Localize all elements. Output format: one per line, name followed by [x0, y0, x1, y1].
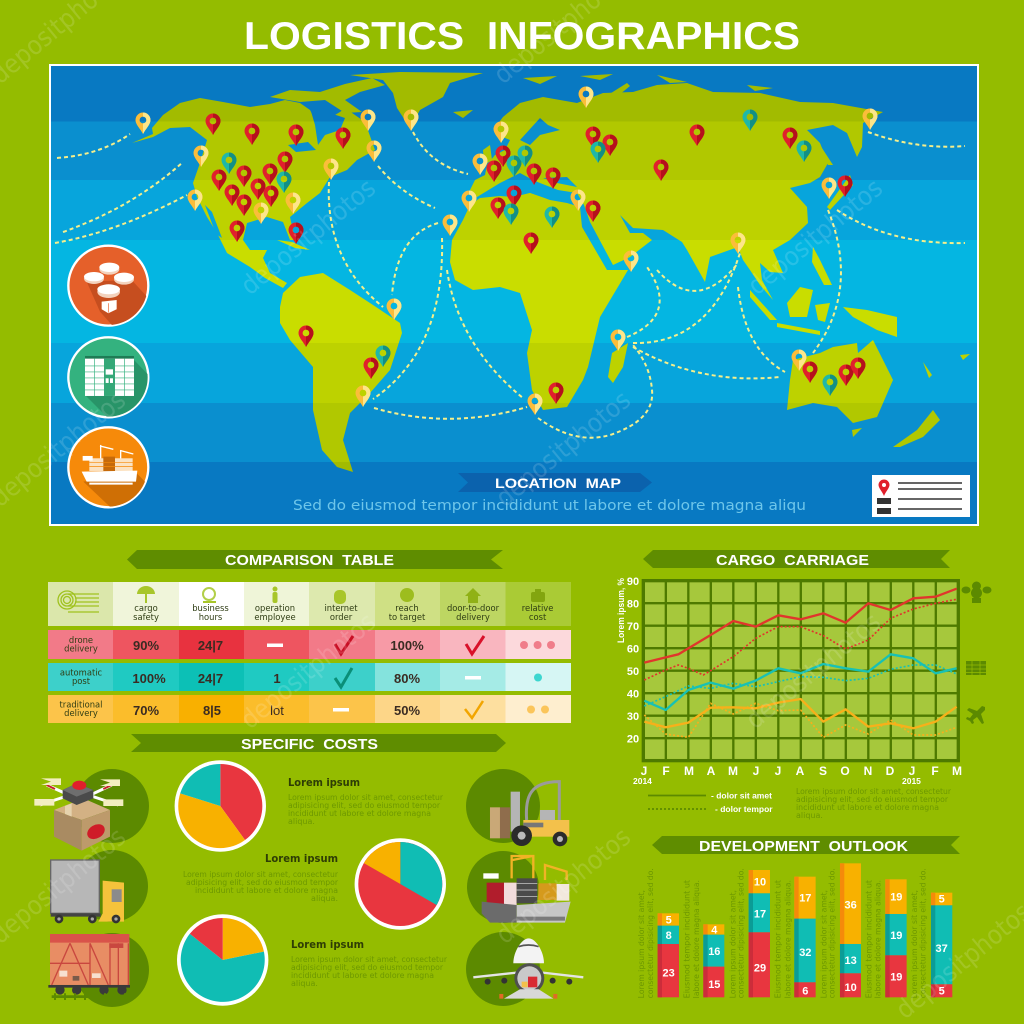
- chart grid and lines: [643, 581, 958, 761]
- map pins: [136, 86, 878, 415]
- table header row: cost: [529, 612, 547, 622]
- vertical captions: consectetur dipisicing elit, sed do.: [918, 868, 928, 998]
- chart legend: [648, 790, 773, 814]
- pie chart 1: [175, 760, 266, 852]
- cargo carriage heading: [643, 550, 950, 569]
- text block 3: incididunt ut labore et dolore magna: [291, 971, 434, 980]
- bar 1: 23: [663, 968, 675, 980]
- row: traditional delivery: lot: [270, 703, 284, 718]
- x axis: A: [796, 764, 805, 778]
- table header row: internet: [324, 603, 358, 613]
- vertical captions: labore et dolore magna aliqua.: [872, 880, 882, 998]
- table header row: [48, 582, 571, 626]
- bar 2: 15: [708, 979, 720, 991]
- chart legend: - dolor tempor: [715, 804, 773, 814]
- icon: cargo plane: [466, 932, 583, 1006]
- row: drone delivery: 24|7: [198, 638, 223, 653]
- vertical captions: Lorem ipsum dolor sit amet,: [818, 890, 828, 998]
- chart note: Lorem ipsum dolor sit amet, consectetur: [796, 787, 952, 796]
- bar 2: [703, 924, 724, 997]
- vertical captions: consectetur dipisicing elit, sed do.: [827, 868, 837, 998]
- row: automatic post: post: [72, 676, 91, 686]
- text block 3: [291, 938, 448, 988]
- bar 7: 5: [939, 986, 945, 998]
- x axis: O: [840, 764, 850, 778]
- table header row: reach: [395, 603, 419, 613]
- x axis: 2014: [633, 776, 652, 786]
- y axis: 90: [627, 576, 639, 588]
- text block 3: Lorem ipsum dolor sit amet, consectetur: [291, 955, 448, 964]
- bar 7: 5: [939, 894, 945, 906]
- bar 2: 16: [708, 946, 720, 958]
- row: drone delivery: delivery: [64, 644, 98, 654]
- bar 4: 6: [802, 985, 808, 997]
- vertical captions: Eiusmod tempor incididunt ut: [864, 879, 874, 998]
- stock photo watermark: depositphotos: [490, 385, 637, 513]
- bar 1: 5: [666, 915, 672, 927]
- x axis: A: [707, 764, 716, 778]
- panel: location map: [50, 65, 978, 525]
- bar 4: [794, 877, 816, 997]
- row: automatic post: 100%: [132, 671, 166, 686]
- row: automatic post: automatic: [60, 668, 103, 678]
- vertical captions: labore et dolore magna aliqua.: [691, 880, 701, 998]
- vertical captions: consectetur dipisicing elit, sed do.: [736, 868, 746, 998]
- row: traditional delivery: 8|5: [203, 703, 221, 718]
- bar 7: 37: [936, 943, 948, 955]
- stock photo watermark: depositphotos: [235, 607, 382, 735]
- table header row: to target: [389, 612, 426, 622]
- bar 3: 29: [754, 963, 766, 975]
- x axis: M: [684, 764, 694, 778]
- text block 2: incididunt ut labore et dolore magna: [195, 886, 338, 895]
- row: traditional delivery: 70%: [133, 703, 159, 718]
- icon: cargo ship badge: [68, 427, 150, 510]
- x axis: M: [728, 764, 738, 778]
- panel: development outlook stacked bars: [636, 863, 952, 998]
- x axis: D: [886, 764, 895, 778]
- row: traditional delivery: [48, 695, 571, 723]
- y axis: 70: [627, 621, 639, 633]
- text block 1: aliqua.: [288, 817, 315, 826]
- location map banner: [458, 473, 652, 492]
- row: drone delivery: 100%: [390, 638, 424, 653]
- bar 1: 8: [666, 930, 672, 942]
- icon: parcel locker badge: [68, 337, 150, 420]
- chart note: [796, 787, 952, 820]
- row: traditional delivery: traditional: [59, 700, 103, 710]
- pie chart 3: [177, 914, 268, 1006]
- table header row: order: [330, 612, 353, 622]
- table header row: employee: [254, 612, 296, 622]
- row: automatic post: 24|7: [198, 671, 223, 686]
- chart note: incididunt ut labore et dolore magna: [796, 803, 939, 812]
- chart note: aliqua.: [796, 811, 823, 820]
- vertical captions: consectetur dipisicing elit, sed do.: [645, 868, 655, 998]
- bar 4: 17: [799, 892, 811, 904]
- row: drone delivery: 90%: [133, 638, 159, 653]
- bar 3: 10: [754, 877, 766, 889]
- vertical captions: Lorem ipsum dolor sit amet,: [727, 890, 737, 998]
- row: traditional delivery: delivery: [64, 708, 98, 718]
- text block 3: Lorem ipsum: [291, 938, 364, 951]
- icon: truck: [51, 850, 148, 923]
- vertical captions: [636, 868, 928, 998]
- x axis: S: [819, 764, 827, 778]
- pie chart 2: [355, 838, 446, 930]
- shipping routes: [55, 132, 965, 438]
- africa and oceania: [450, 145, 970, 447]
- text block 2: Lorem ipsum dolor sit amet, consectetur: [183, 870, 339, 879]
- bar 6: 19: [890, 892, 902, 904]
- bar 6: 19: [890, 972, 902, 984]
- row: automatic post: 1: [273, 671, 281, 686]
- world map continents: [132, 72, 883, 472]
- x axis: F: [662, 764, 670, 778]
- text block 1: adipisicing elit, sed do eiusmod tempor: [288, 801, 441, 810]
- text block 1: Lorem ipsum: [288, 776, 360, 789]
- vertical captions: Lorem ipsum dolor sit amet,: [636, 890, 646, 998]
- table header row: cargo: [134, 603, 158, 613]
- table header row: operation: [255, 603, 295, 613]
- text block 2: [183, 852, 339, 903]
- vertical captions: labore et dolore magna aliqua.: [782, 880, 792, 998]
- title: LOGISTICS INFOGRAPHICS: [244, 15, 800, 58]
- y axis: 20: [627, 734, 639, 746]
- y axis: 60: [627, 644, 639, 656]
- panel: cargo carriage line chart: [616, 576, 992, 820]
- stock photo watermark: depositphotos: [490, 822, 637, 950]
- text block 2: aliqua.: [311, 894, 338, 903]
- row: automatic post: [48, 663, 571, 691]
- development outlook heading: [652, 836, 960, 855]
- text block 1: incididunt ut labore et dolore magna: [288, 809, 431, 818]
- panel: comparison table: [48, 582, 571, 723]
- comparison table heading: COMPARISON TABLE: [225, 552, 394, 569]
- icon: locker silhouette: [966, 661, 986, 675]
- table header row: delivery: [456, 612, 490, 622]
- chart note: adipisicing elit, sed do eiusmod tempor: [796, 795, 949, 804]
- stock photo watermark: depositphotos: [235, 173, 382, 301]
- development outlook heading: DEVELOPMENT OUTLOOK: [699, 838, 908, 855]
- y axis: Lorem ipsum, %: [616, 578, 626, 643]
- bar 6: [885, 879, 907, 997]
- text block 3: aliqua.: [291, 979, 318, 988]
- y axis: 50: [627, 666, 639, 678]
- comparison table heading: [127, 550, 503, 569]
- icon: rail wagon: [48, 933, 149, 1007]
- vertical captions: Eiusmod tempor incididunt ut: [682, 879, 692, 998]
- bar 5: [840, 863, 861, 997]
- seas over land: [205, 108, 580, 238]
- icon: forklift: [466, 769, 569, 846]
- table header row: safety: [133, 612, 159, 622]
- icon: drone badge: [68, 246, 150, 327]
- map legend: [872, 475, 970, 517]
- cargo carriage heading: CARGO CARRIAGE: [716, 552, 869, 569]
- vertical captions: Eiusmod tempor incididunt ut: [773, 879, 783, 998]
- icon: plane silhouette: [966, 706, 985, 724]
- bar 5: 13: [845, 955, 857, 967]
- table header row: relative: [522, 603, 553, 613]
- text block 1: [288, 776, 444, 826]
- x axis: M: [952, 764, 962, 778]
- table header row: hours: [199, 612, 222, 622]
- x axis: F: [931, 764, 939, 778]
- row: automatic post: 80%: [394, 671, 420, 686]
- specific costs heading: SPECIFIC COSTS: [241, 736, 378, 753]
- y axis: [616, 576, 639, 746]
- y axis: 30: [627, 711, 639, 723]
- bar 2: 4: [711, 925, 718, 937]
- panel: specific costs: [34, 760, 583, 1007]
- bar 3: 17: [754, 908, 766, 920]
- table header row: business: [192, 603, 229, 613]
- x axis: J: [775, 764, 781, 778]
- text block 3: adipisicing elit, sed do eiusmod tempor: [291, 963, 444, 972]
- icon: drone silhouette: [962, 582, 992, 603]
- stock photo watermark: depositphotos: [742, 173, 889, 301]
- bar 6: 19: [890, 930, 902, 942]
- bar 4: 32: [799, 947, 811, 959]
- bar 3: [749, 870, 770, 997]
- text block 2: Lorem ipsum: [265, 852, 338, 865]
- icon: container ship: [467, 851, 571, 923]
- vertical captions: Lorem ipsum dolor sit amet,: [909, 890, 919, 998]
- table header row: door-to-door: [447, 603, 500, 613]
- x axis: [633, 764, 962, 786]
- stock photo watermark: depositphotos: [740, 607, 887, 735]
- text block 1: Lorem ipsum dolor sit amet, consectetur: [288, 793, 444, 802]
- row: drone delivery: drone: [69, 635, 93, 645]
- bar 5: 36: [845, 900, 857, 912]
- map caption: Sed do eiusmod tempor incididunt ut labore et dolore magna aliqu: [293, 498, 806, 514]
- row: traditional delivery: 50%: [394, 703, 420, 718]
- y axis: 40: [627, 688, 639, 700]
- bar 1: [658, 913, 679, 997]
- location map banner: LOCATION MAP: [495, 475, 621, 491]
- x axis: 2015: [902, 776, 921, 786]
- icon: drone with parcel: [34, 769, 149, 851]
- x axis: J: [641, 764, 647, 778]
- x axis: N: [864, 764, 872, 778]
- chart legend: - dolor sit amet: [711, 790, 772, 800]
- text block 2: adipisicing elit, sed do eiusmod tempor: [186, 878, 339, 887]
- bar 5: 10: [845, 982, 857, 994]
- row: drone delivery: [48, 630, 571, 659]
- bar 7: [931, 893, 952, 998]
- x axis: J: [753, 764, 759, 778]
- y axis: 80: [627, 598, 639, 610]
- specific costs heading: [131, 734, 506, 753]
- x axis: J: [909, 764, 915, 778]
